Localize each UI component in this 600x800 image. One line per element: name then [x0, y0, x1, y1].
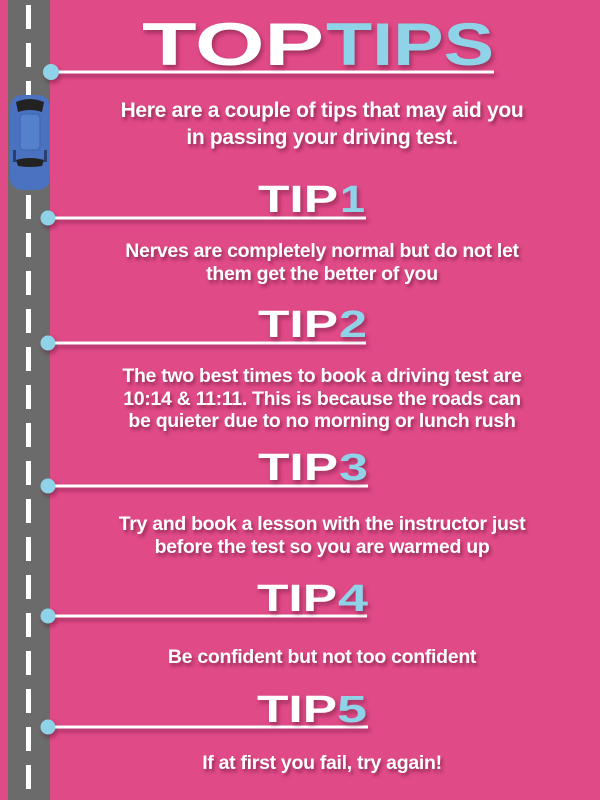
connector lines and dots	[40, 64, 494, 734]
tip 3 text: Try and book a lesson with the instructor just	[119, 513, 525, 535]
tip headings: 4	[338, 578, 368, 620]
tip 1 text: Nerves are completely normal but do not let	[125, 240, 519, 262]
tip 4 text: Be confident but not too confident	[168, 646, 476, 668]
tip 3 text	[118, 513, 528, 562]
tip 2 text	[122, 365, 525, 436]
intro text: in passing your driving test.	[186, 126, 458, 149]
tip headings: 5	[337, 689, 367, 731]
tip headings: TIP	[257, 689, 337, 731]
intro text	[121, 99, 526, 154]
tip headings: TIP	[258, 179, 338, 221]
intro text: Here are a couple of tips that may aid you	[121, 99, 523, 122]
title: TOP	[142, 11, 324, 78]
tip 3 text: before the test so you are warmed up	[155, 536, 489, 558]
title: TIPS	[326, 11, 494, 78]
tip 2 text: The two best times to book a driving test are	[122, 365, 522, 387]
tip headings: TIP	[258, 447, 338, 489]
icon: car	[10, 95, 50, 190]
tip 1 text	[125, 240, 522, 289]
tip 2 text: 10:14 & 11:11. This is because the roads can	[123, 388, 521, 410]
tip headings	[257, 179, 368, 731]
tip headings: TIP	[257, 578, 337, 620]
tip 5 text: If at first you fail, try again!	[202, 752, 442, 774]
title	[142, 11, 494, 78]
tip 2 text: be quieter due to no morning or lunch rush	[128, 410, 516, 432]
tip 1 text: them get the better of you	[206, 262, 438, 284]
tip headings: 1	[340, 179, 365, 221]
tip headings: TIP	[258, 304, 338, 346]
tip headings: 3	[339, 447, 368, 489]
tip headings: 2	[339, 304, 367, 346]
